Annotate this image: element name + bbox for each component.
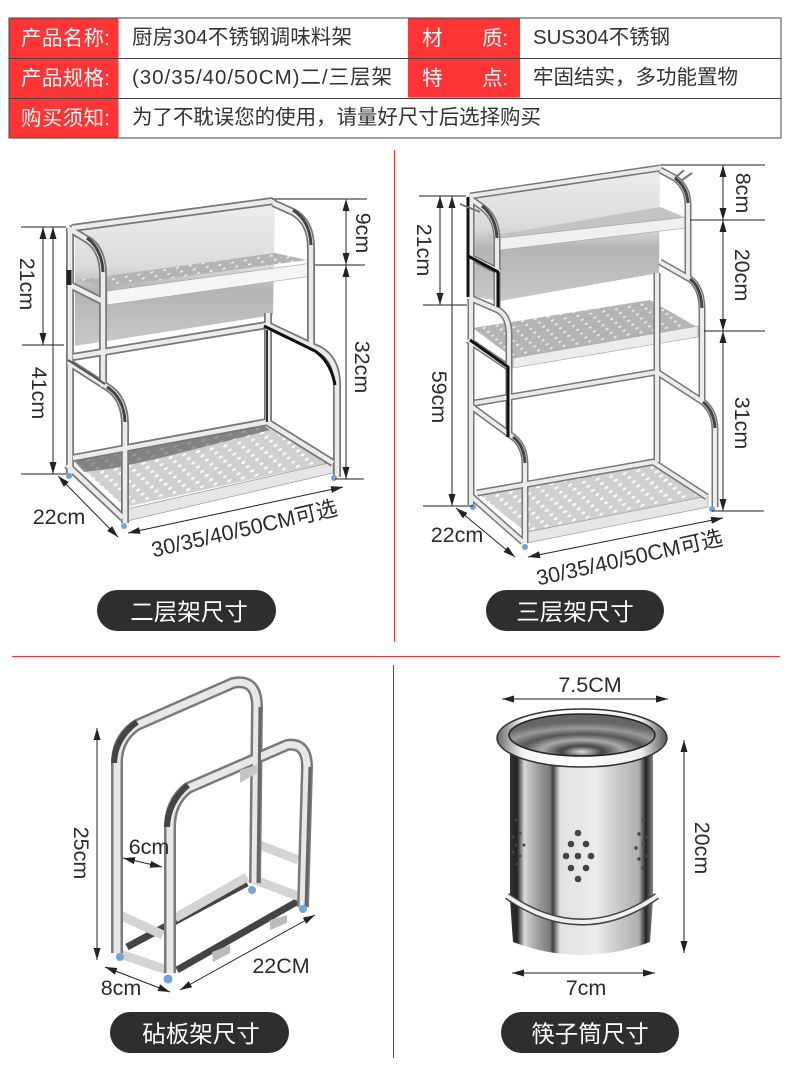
dimension labels: two-tier: 21cm <box>15 258 39 310</box>
dimension labels: three-tier: 59cm <box>427 371 451 423</box>
dimension labels: three-tier <box>412 173 755 590</box>
panel: chopstick holder <box>497 673 714 1053</box>
dimension labels: two-tier: 22cm <box>33 505 85 529</box>
panel: cutting board rack <box>69 682 315 1053</box>
dimension lines: two-tier <box>21 199 367 537</box>
pill: chopstick holder <box>501 1012 679 1053</box>
dimension labels: chopstick holder <box>558 673 714 1000</box>
row 2 text <box>21 66 738 90</box>
rack illustration: two-tier <box>66 201 337 529</box>
row 1 text: 质: <box>482 27 508 50</box>
row 3 text: 为了不耽误您的使用，请量好尺寸后选择购买 <box>132 106 541 129</box>
divider: gray vertical <box>393 665 394 1058</box>
dimension labels: three-tier: 8cm <box>731 173 755 213</box>
pill: three-tier: 三层架尺寸 <box>516 599 634 625</box>
dimension lines: three-tier <box>419 165 765 557</box>
row 2 text: (30/35/40/50CM)二/三层架 <box>132 66 392 89</box>
panel: two-tier rack <box>15 199 375 631</box>
dimension labels: cutting board: 25cm <box>69 827 93 879</box>
dimension labels: three-tier: 22cm <box>431 523 483 547</box>
row 2 text: 产品规格: <box>21 67 110 90</box>
pill: chopstick holder: 筷子筒尺寸 <box>531 1021 649 1047</box>
dimension labels: three-tier: 30/35/40/50CM可选 <box>534 526 725 590</box>
illustration: chopstick holder <box>497 709 667 955</box>
dimension labels: three-tier: 31cm <box>730 397 754 449</box>
dimension labels: cutting board: 6cm <box>129 835 169 859</box>
row 1 text: 材 <box>422 27 442 50</box>
pill: cutting board <box>110 1012 289 1053</box>
row 2 text: 点: <box>482 67 508 90</box>
row 1 text: 厨房304不锈钢调味料架 <box>132 26 352 49</box>
pill: two-tier: 二层架尺寸 <box>130 599 248 625</box>
dimension labels: two-tier <box>15 213 375 562</box>
row 2 text: 特 <box>422 67 442 90</box>
row 1 text: 产品名称: <box>21 27 110 50</box>
dimension labels: cutting board <box>69 827 310 1000</box>
row 1 text: SUS304不锈钢 <box>533 26 670 49</box>
row 1 text <box>21 26 670 50</box>
holes <box>512 818 649 882</box>
dimension labels: three-tier: 20cm <box>730 249 754 301</box>
dimension labels: chopstick holder: 7cm <box>566 976 606 1000</box>
dimension labels: chopstick holder: 7.5CM <box>558 673 622 697</box>
dimension lines: cutting board <box>97 728 315 992</box>
divider: red vertical <box>394 150 395 642</box>
pill: three-tier <box>486 590 664 631</box>
row 3 text: 购买须知: <box>21 107 110 130</box>
divider: red horizontal <box>12 656 780 657</box>
dimension labels: two-tier: 41cm <box>27 367 51 419</box>
pill: cutting board: 砧板架尺寸 <box>142 1021 260 1047</box>
dimension labels: two-tier: 30/35/40/50CM可选 <box>149 496 340 562</box>
row 2 text: 牢固结实，多功能置物 <box>533 66 738 89</box>
spec table <box>9 18 781 138</box>
panel: three-tier rack <box>412 165 765 631</box>
dimension labels: three-tier: 21cm <box>412 224 436 276</box>
red header cells <box>10 18 520 138</box>
rack illustration: three-tier <box>460 168 715 550</box>
dimension labels: cutting board: 8cm <box>101 976 141 1000</box>
dimension labels: cutting board: 22CM <box>252 954 310 978</box>
dimension labels: two-tier: 32cm <box>350 341 374 393</box>
pill: two-tier <box>97 590 276 631</box>
dimension lines: chopstick holder <box>502 699 684 973</box>
rack illustration: cutting board <box>114 682 310 984</box>
dimension labels: chopstick holder: 20cm <box>690 822 714 874</box>
dimension labels: two-tier: 9cm <box>351 213 375 253</box>
